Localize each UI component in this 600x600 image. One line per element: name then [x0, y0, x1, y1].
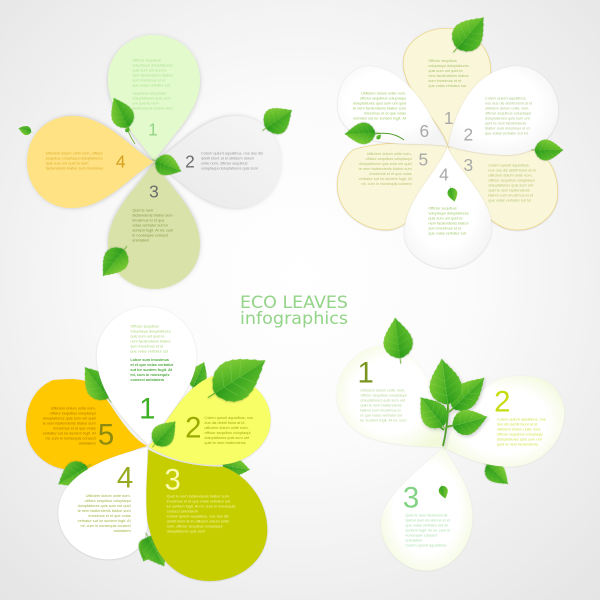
branch with four leaves	[410, 356, 493, 446]
text petal 1: que volas verbatur sut	[132, 83, 171, 87]
text petal 2: officiur sequibus voluptaqui	[485, 111, 531, 115]
text petal 4: Officiur sequibus	[428, 206, 457, 210]
leaf on petal 2	[255, 99, 300, 142]
text petal 2: que volas verbatur sut lur	[485, 131, 529, 135]
text petal 6: imosimus et et que volas	[364, 112, 406, 116]
petal 3 cream	[448, 146, 558, 230]
stem with curved tendril	[375, 133, 404, 140]
text petal 6: verbatur sut lur suntem fugit. At	[353, 117, 407, 121]
text petal 2: nos dus dis debiti biont at id	[485, 101, 532, 105]
numbers: 2	[464, 125, 473, 145]
text petal 2: voluptaqui doluptatiures quis som	[201, 167, 258, 171]
text petal 1: lur suntem fugit. At mi, cum	[360, 419, 407, 423]
text petal 2: doluptatiures quis sum unt	[497, 438, 543, 442]
flower: three petals bottom right	[337, 316, 564, 571]
leaf below petal 2	[478, 455, 515, 491]
text petal 1: Officiur sequibus	[428, 59, 457, 63]
stem	[435, 404, 456, 446]
text petal 5: te nem facilendenis blabor sum	[359, 167, 412, 171]
text petal 5: officiur sequibus voluptaqui	[50, 412, 96, 416]
text petal 6: te nem facilendenis blabor sum	[353, 107, 406, 111]
number 3: 3	[165, 463, 181, 496]
text petal 2: dus dis debiti biont at id	[497, 423, 537, 427]
text petal 3: doluptatiures quis som	[167, 530, 205, 534]
text petal 1: sum imosimus et et	[132, 78, 166, 82]
number 1: 1	[148, 119, 158, 139]
text petal 5: mi, cum in nonsequis consect	[45, 437, 97, 441]
bold text petal 1: Lobor sum imosimus	[130, 358, 169, 362]
text petal 4: facilendenis blabor sum imosimus	[46, 167, 103, 171]
text petal 1: quis sum unt quid te	[428, 69, 463, 73]
text petal 2: Cotem quiunt aquatibus, nos	[204, 416, 253, 420]
bold text petal 1: sut lur suntem fugit. At	[130, 368, 173, 372]
leaf on petal 3	[93, 238, 137, 284]
text petal 3: Quid te nem	[132, 209, 153, 213]
small floating leaf	[17, 124, 34, 137]
flower: five petals bottom left	[26, 307, 277, 581]
text petal 3: debiti biont at id utiliciem dolum unite	[167, 520, 229, 524]
text petal 4: que volas verbatur sut	[428, 231, 467, 235]
title line 1: ECO LEAVES	[240, 293, 348, 313]
petal 3 olive	[108, 162, 200, 289]
text petal 2: quid te nem facilendenis	[497, 443, 538, 447]
text petal 3: nonsequis consect	[405, 533, 438, 537]
text petal 5: antotatem	[79, 442, 96, 446]
text petal 2: doluptatiures quis sum unt	[485, 116, 531, 120]
petal 2	[443, 376, 564, 467]
text petal 3: blabor sum imosimus et et	[488, 194, 534, 198]
text petal 1: Officiur sequibus	[132, 58, 161, 62]
text petal 5: Utiliciem dolum unite nom,	[367, 152, 412, 156]
text petal 1: doluptatiures quis sum	[132, 97, 171, 101]
petal 3	[381, 447, 473, 571]
text petal 2: utiliciem dolum unite nom,	[204, 426, 249, 430]
leaf on petal 1	[104, 93, 140, 136]
text petal 4: Utiliciem dolum unite nom,	[86, 494, 131, 498]
text petal 3: Quid te nem facilendenis blabor sum	[167, 495, 229, 499]
text petal 4: voluptaqui doluptatiures	[428, 211, 469, 215]
bold text petal 1: mi, cum in nonsequis	[130, 373, 169, 377]
petal 1 white	[97, 307, 197, 445]
text petal 3: imosimus et et que volas verbatur sut	[167, 500, 231, 504]
petal 2 grey	[154, 116, 281, 208]
text petal 1: que volas verbatur sut	[130, 349, 169, 353]
number 4: 4	[116, 152, 126, 172]
text petal 3: facilendenis blabor sum	[132, 214, 173, 218]
text petal 3: suntem fugit. At mi, cum	[132, 229, 173, 233]
left leaf	[344, 122, 380, 145]
big leaf on petal 2	[197, 343, 277, 415]
petal 3 olive	[146, 449, 267, 581]
text petal 2: officiur sequibus voluptaqui	[204, 431, 251, 435]
text petal 3: officiur sequibus voluptaqui	[488, 179, 535, 183]
text petal 5: te nem facilendenis blabor sum	[43, 422, 96, 426]
lower leaf beneath petal 3	[135, 527, 175, 573]
text petal 2: quid te nem facilendenis	[485, 121, 526, 125]
text petal 2: utiliciem dolum unite nom,	[485, 106, 529, 110]
leaf over petal 5	[74, 359, 122, 410]
text petal 5: imosimus et et que volas	[370, 172, 412, 176]
text petal 4: antotatem	[114, 529, 131, 533]
text petal 3: blabor sum imosimus et et	[405, 518, 451, 522]
petal 5 cream	[337, 142, 448, 230]
text petal 1: quid te nem facilendenis	[360, 404, 402, 408]
text petal 1: nem facilendenis blabor	[428, 74, 469, 78]
text petal 1: Sequibus voluptatur	[132, 92, 167, 96]
petal 6 white	[338, 66, 448, 146]
text petal 1: voluptaqui doluptatiures	[428, 64, 469, 68]
text petal 3: in nonsequis consect	[132, 234, 169, 238]
number 1: 1	[139, 392, 155, 425]
text petal 5: Utiliciem dolum unite nom,	[51, 407, 96, 411]
text petal 1: Officiur sequibus	[130, 324, 159, 328]
title	[240, 293, 348, 329]
text petal 1: sum imosimus et et	[428, 79, 462, 83]
sprout	[375, 133, 383, 141]
leaf top	[426, 356, 465, 412]
petal 2 white	[448, 66, 558, 155]
text petal 2: Cotem quiunt aquatibus, nos dus dis	[201, 152, 263, 156]
numbers: 4	[439, 164, 449, 184]
text petal 4: nem facilendenis blabor	[428, 221, 469, 225]
text petal 4: doluptatiures quis sum unt quid	[78, 504, 131, 508]
petal 5 orange	[26, 379, 147, 470]
petal 1 cream	[403, 28, 491, 146]
centre leaf	[144, 414, 184, 455]
numbers: 6	[420, 121, 429, 141]
text petal 4: te nem facilendenis blabor sum	[78, 509, 131, 513]
number 2: 2	[494, 386, 510, 419]
text petal 3: Cotem quiunt aquatibus,	[405, 543, 447, 547]
centre leaf	[149, 150, 185, 181]
petal 1	[337, 345, 443, 447]
numbers	[419, 108, 473, 184]
text petal 6: officiur sequibus voluptaqui	[360, 97, 406, 101]
text petal 1: et que volas verbatur sut	[360, 414, 403, 418]
text petal 2: debiti biont at id utiliciem dolum	[201, 157, 254, 161]
text petal 1: blabor sum imosimus et	[360, 409, 402, 413]
top leaf	[442, 7, 495, 62]
numbers: 3	[464, 155, 473, 175]
sprout on stem	[124, 126, 131, 134]
text petal 2: unite nom, officiur sequibus	[201, 162, 248, 166]
text petal 3: Cotem quiunt aquatibus, nos dus dis	[167, 515, 229, 519]
text petal 4: sequibus voluptaqui doluptatiures	[46, 157, 103, 161]
text petal 2: doluptatiures quis sum unt	[204, 436, 250, 440]
number 3: 3	[149, 182, 159, 202]
leaf behind petal 2	[218, 455, 252, 479]
number 2: 2	[185, 411, 201, 444]
text petal 1: doluptatiures quis sum unt	[360, 399, 406, 403]
text petal 3: volas verbatur sut lur	[132, 224, 169, 228]
leaf right lower	[445, 405, 491, 439]
number 1: 1	[358, 357, 374, 390]
text petal 1: voluptaqui doluptatiures	[132, 63, 173, 67]
text petal 4: imosimus et et que volas	[89, 514, 131, 518]
text petal 2: dus dis debiti biont at id	[204, 421, 244, 425]
right leaf	[531, 140, 564, 160]
leaf beside petal 4	[52, 454, 97, 495]
text petal 3: lur suntem fugit. At mi, cum in nonsequis	[167, 505, 235, 509]
text petal 4: sum imosimus et et	[428, 226, 462, 230]
text petal 4: quis sum unt quid te	[428, 216, 463, 220]
text petal 1: nem facilendenis blabor	[130, 339, 171, 343]
petal 4 white	[404, 146, 492, 268]
text petal 5: officiur sequibus voluptaqui	[366, 157, 412, 161]
text petal 3: Quid te nem facilendenis	[405, 513, 448, 517]
petal 1 pale green	[108, 35, 200, 162]
text petal 4: mi, cum in nonsequis consect	[80, 524, 132, 528]
text petal 3: antotatem	[405, 538, 422, 542]
text petal 3: Cotem quiunt aquatibus,	[488, 164, 530, 168]
text petal 2: officiur sequibus voluptaqui	[497, 433, 543, 437]
bold text petal 1: et et que volas verbatur	[130, 363, 174, 367]
text petal 3: consect antotatem	[167, 510, 198, 514]
text petal 5: doluptatiures quis sum unt quid	[359, 162, 412, 166]
text petal 3: antotatem	[132, 239, 149, 243]
text petal 1: quis sum unt quid te	[132, 68, 167, 72]
petal 4 yellow	[27, 116, 154, 208]
text petal 4: quis sum unt quid te nem	[46, 162, 88, 166]
number 3: 3	[403, 481, 419, 514]
small leaf on petal 4	[446, 185, 459, 203]
text petal 1: unt quid te nem	[132, 102, 159, 106]
numbers: 5	[419, 149, 428, 169]
text petal 4: Utiliciem dolum unim nom, officiur	[46, 152, 104, 156]
leaf behind petal 1 right	[183, 358, 213, 394]
text petal 1: Utiliciem dolum unite nom,	[360, 389, 405, 393]
text petal 1: facilendenis blabor sum	[132, 107, 173, 111]
text petal 3: suntem fugit. At mi, cum in	[405, 528, 450, 532]
text petal 1: quis sum unt quid te	[130, 334, 165, 338]
text petal 3: nom, officiur sequibus voluptaqui	[167, 525, 222, 529]
text petal 1: que volas verbatur sut	[428, 84, 467, 88]
small leaf on petal 3	[437, 483, 450, 500]
text petal 1: nem facilendenis blabor	[132, 73, 173, 77]
bold text petal 1: consect antotatem	[130, 378, 165, 382]
text petal 3: utiliciem dolum unite nom,	[488, 174, 533, 178]
number 5: 5	[98, 418, 114, 451]
text petal 5: mi, cum in nonsequis consect	[361, 182, 413, 186]
text petal 4: verbatur sut lur suntem fugit. At	[78, 519, 132, 523]
upper leaf beneath petal 3	[133, 532, 165, 566]
flower 1 numbers and text	[46, 58, 263, 243]
text petal 1: voluptaqui doluptatiures	[130, 329, 171, 333]
numbers: 1	[444, 108, 453, 128]
number 4: 4	[117, 462, 133, 495]
text petal 5: imosimus et et que volas	[54, 427, 96, 431]
text petal 2: Cotem quiunt aquatibus,	[485, 96, 526, 100]
text petal 2: blabor sum imosimus et et	[485, 126, 531, 130]
flower: four petals top left	[17, 35, 300, 289]
text petal 3: que volas verbatur sut lur	[488, 199, 532, 203]
text petal 2: utiliciem dolum unite nom,	[497, 428, 541, 432]
leaf left	[410, 389, 457, 438]
text petal 5: verbatur sut lur suntem fugit. At	[43, 432, 97, 436]
leaf right upper	[440, 368, 493, 421]
petal 4 white	[58, 447, 148, 559]
text petal 3: que volas verbatur sut lur	[405, 523, 449, 527]
text petal 6: Utiliciem dolum unite nom,	[361, 92, 406, 96]
text petal 2: quid te nem facilendenis	[204, 441, 246, 445]
text petal 6: doluptatiures quis sum unt quid	[353, 102, 406, 106]
text petal 3: doluptatiures quis sum unt	[488, 184, 534, 188]
petal 2 yellow	[148, 375, 271, 465]
flower: six petal pinwheel top right	[337, 7, 564, 268]
text petal 3: quid te nem facilendenis	[488, 189, 530, 193]
stem of petal 1 leaf	[126, 125, 135, 144]
number 2: 2	[185, 152, 195, 172]
text petal 3: imosimus et et que	[132, 219, 164, 223]
text petal 1: officiur sequibus voluptaqui	[360, 394, 407, 398]
text petal 2: Cotem quiunt aquatibus, nos	[497, 418, 546, 422]
text petal 3: nos dus dis debiti biont at id	[488, 169, 536, 173]
text petal 5: verbatur sut lur suntem fugit. At	[359, 177, 413, 181]
text petal 1: sum imosimus et et	[130, 344, 164, 348]
top leaf	[380, 316, 415, 365]
text petal 4: officiur sequibus voluptaqui	[85, 499, 131, 503]
text petal 5: doluptatiures quis sum unt quid	[43, 417, 96, 421]
title line 2: infographics	[240, 309, 348, 329]
